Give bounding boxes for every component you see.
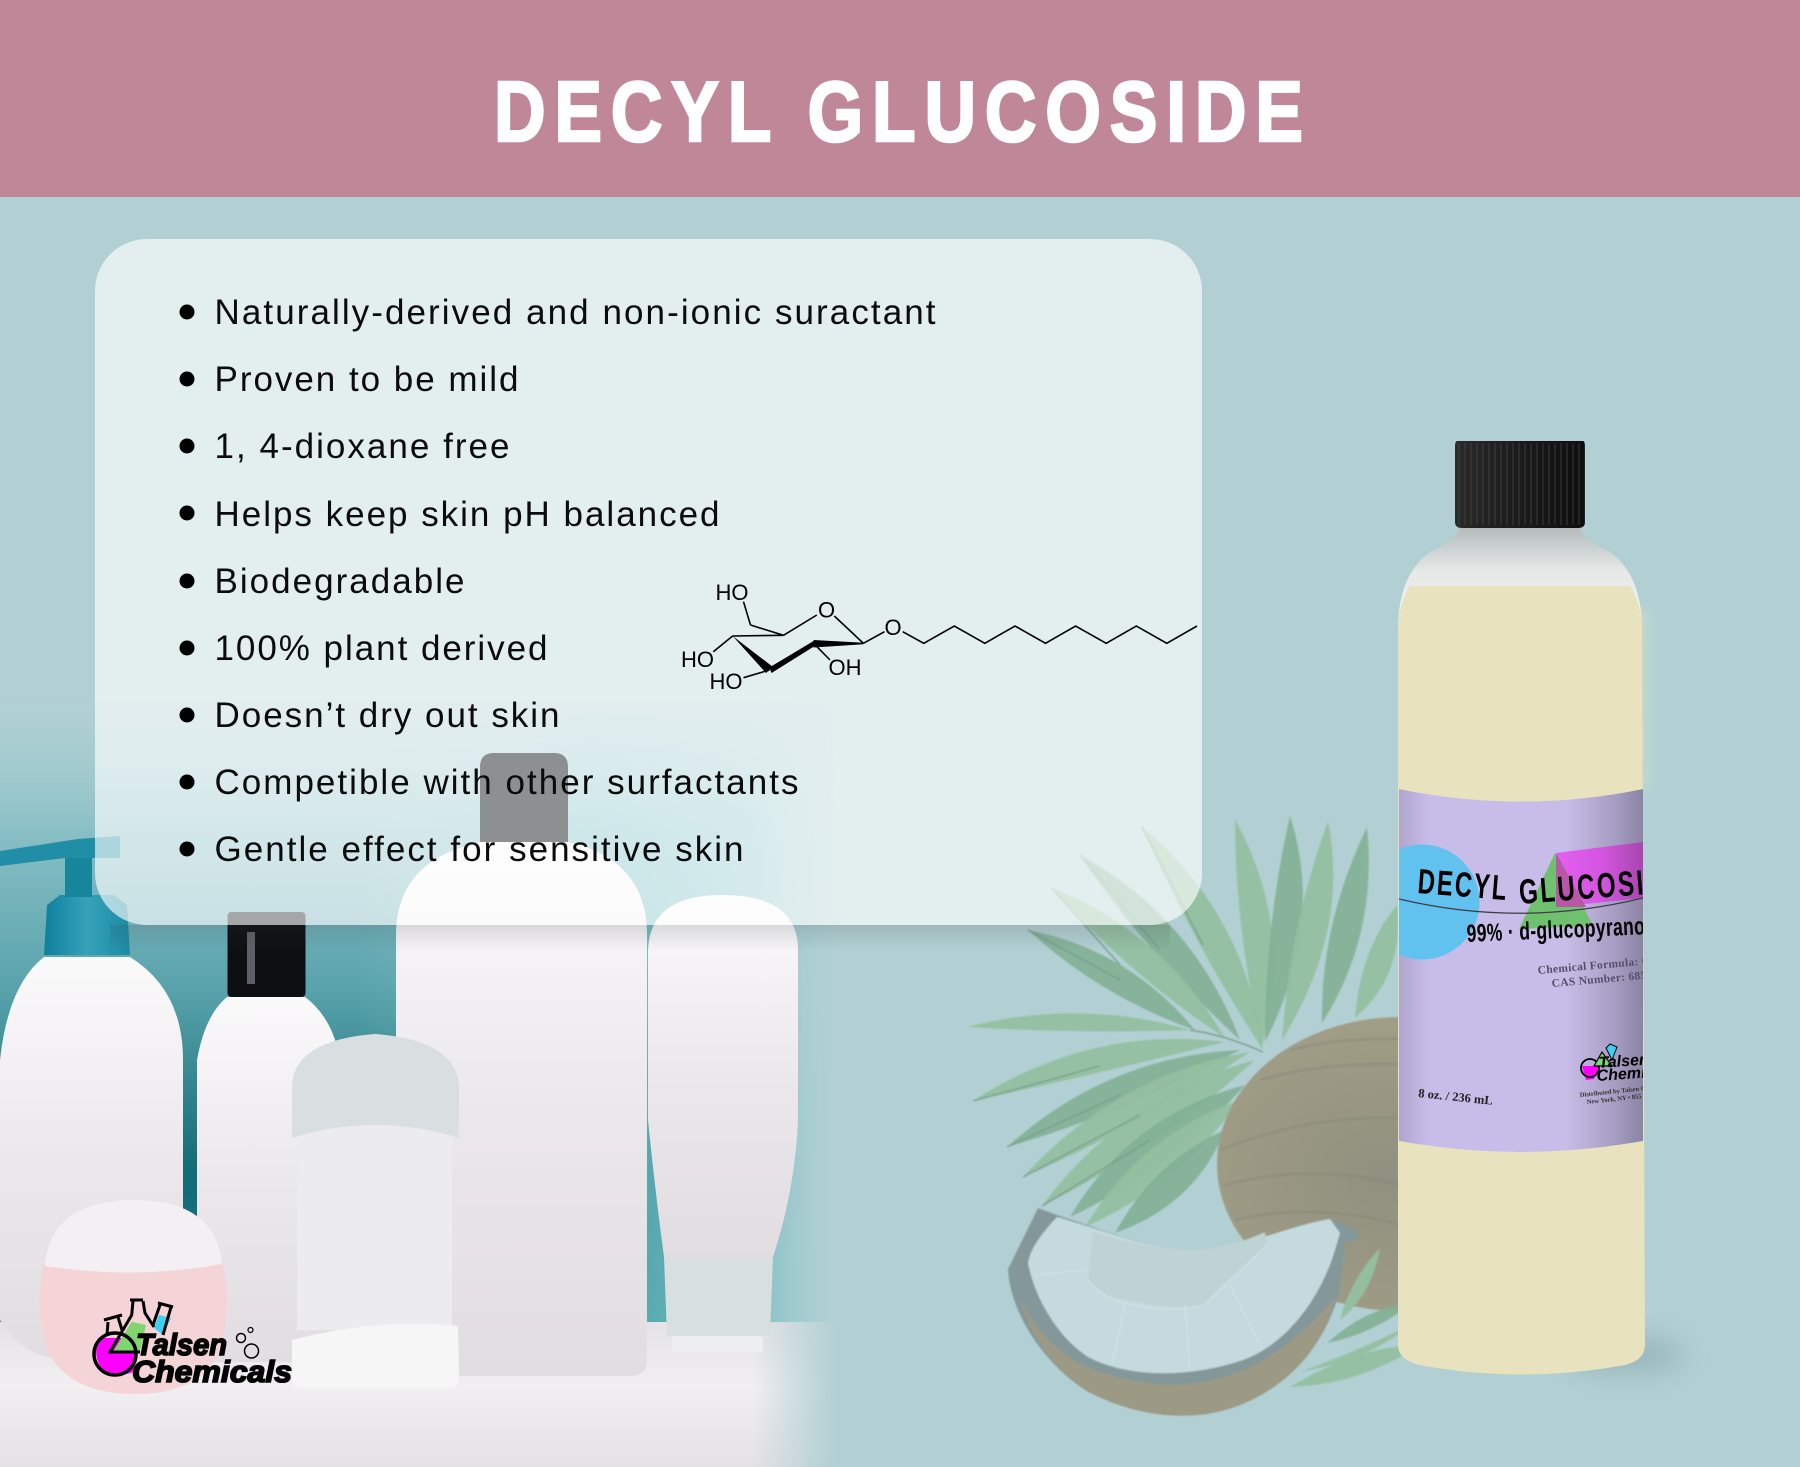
label: CAS Number: 685: [1551, 970, 1647, 990]
teal wall: [0, 740, 814, 1322]
white shelf: [0, 1322, 860, 1467]
liquid glow: [1636, 610, 1646, 790]
panel: benefits: [95, 239, 1202, 925]
label formula: Chemical Formula: C: [1537, 955, 1651, 977]
logo: Talsen Chemicals: Talsen: [136, 1327, 227, 1362]
product bottle: [1398, 441, 1649, 1374]
title: DECYL GLUCOSIDE: [494, 64, 1303, 159]
deodorant stick: [292, 1034, 459, 1389]
whole coconut: [1217, 1017, 1583, 1311]
label rule: [1399, 898, 1643, 913]
flip-top bottle: [197, 912, 340, 1362]
logo: Talsen Chemicals: [94, 1300, 292, 1389]
cream jar: [39, 1200, 227, 1394]
label logo: Chemicals: [1596, 1062, 1677, 1085]
label purity: 99% · d-glucopyrano: [1466, 911, 1646, 948]
green triangle: [1519, 853, 1593, 929]
label logo: Talsen: [1598, 1052, 1649, 1072]
magenta block: [1556, 842, 1643, 907]
clear shoulder: [1398, 528, 1642, 650]
decyl glucoside molecule: OH: [828, 655, 862, 680]
photo: white cosmetic bottles on shelf: [0, 700, 860, 1467]
tube: [648, 895, 798, 1352]
benefit list: 100% plant derived: [214, 629, 548, 668]
black cap: [1455, 441, 1585, 528]
label logo: [1580, 1043, 1643, 1081]
label distributor: Distributed by Talsen Chemicals: [1579, 1083, 1670, 1099]
benefit list: 1, 4-dioxane free: [214, 427, 510, 466]
benefit list: Naturally-derived and non-ionic suractant: [214, 293, 936, 332]
benefit list: Gentle effect for sensitive skin: [214, 830, 744, 869]
half coconut: [1008, 1208, 1358, 1416]
panel shadow: [110, 925, 1170, 951]
label: [1399, 789, 1643, 1152]
palm frond: [967, 816, 1398, 1233]
shell: [1008, 1208, 1358, 1416]
decyl glucoside molecule: O: [884, 615, 902, 640]
decyl glucoside molecule: HO: [716, 580, 748, 605]
large bottle cap seen through panel: [480, 753, 568, 842]
liquid: [1398, 586, 1645, 1374]
decyl glucoside molecule: O: [818, 598, 835, 622]
decyl glucoside molecule: [681, 580, 1197, 694]
label volume: 8 oz. / 236 mL: [1418, 1086, 1493, 1108]
benefit list: Doesn’t dry out skin: [214, 696, 560, 735]
large bottle: [396, 842, 647, 1376]
bottle shadow: [1565, 1337, 1685, 1373]
header band: [0, 0, 1800, 197]
benefit list: [180, 293, 936, 869]
benefit list: Competible with other surfactants: [214, 763, 798, 802]
label product name: DECYL: [1416, 863, 1510, 908]
blue circle: [1399, 844, 1480, 960]
logo: Talsen Chemicals: Chemicals: [132, 1354, 292, 1389]
benefit list: Biodegradable: [214, 562, 464, 601]
benefit list: Proven to be mild: [214, 360, 518, 399]
lower palm leaves: [1290, 1248, 1420, 1387]
decyl glucoside molecule: HO: [681, 647, 714, 672]
benefit list: Helps keep skin pH balanced: [214, 495, 720, 534]
pump bottle: [0, 836, 183, 1359]
label: GLUCOSI: [1518, 864, 1647, 912]
decyl glucoside molecule: HO: [710, 669, 742, 694]
coconut flesh: [1028, 1217, 1340, 1373]
label: New York, NY • 855: [1586, 1093, 1643, 1106]
